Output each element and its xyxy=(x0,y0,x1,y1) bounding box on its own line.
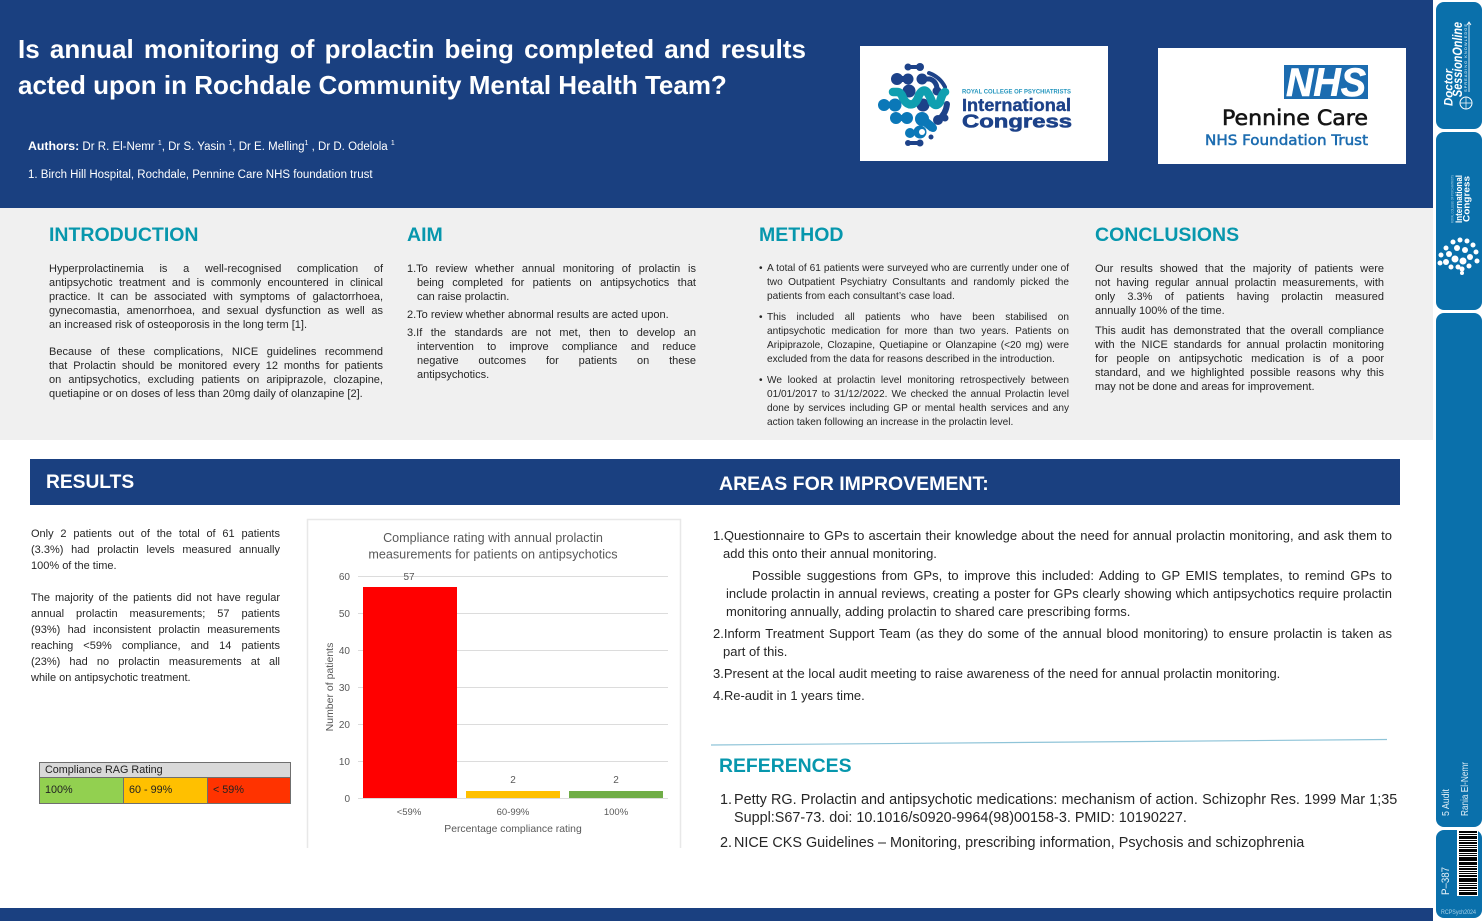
bar chart: compliance rating: 60 xyxy=(339,572,350,583)
poster number: P–387 xyxy=(1440,867,1452,895)
bar chart: compliance rating: 60-99% xyxy=(497,807,530,818)
method bullet list: patients from each consultant’s case load. xyxy=(767,291,955,302)
logo: RCPsych International Congress xyxy=(860,46,1108,161)
sidebar logo text xyxy=(1442,21,1472,110)
bar chart: compliance rating: 20 xyxy=(339,720,350,731)
bar chart: compliance rating: 2 xyxy=(613,775,619,786)
aim list: being completed for patients on antipsychotics that xyxy=(417,277,696,289)
method bullet list: We looked at prolactin level monitoring retrospectively between xyxy=(767,375,1069,386)
bar chart: compliance rating: Compliance rating with annual prolactin xyxy=(383,531,603,545)
grey band of four summary sections xyxy=(0,208,1433,440)
sidebar logo text: SessionOnline xyxy=(1450,22,1465,97)
barcode xyxy=(1457,830,1478,896)
results text: (93%) had inconsistent prolactin measurements xyxy=(31,624,280,636)
sidebar tab: poster number and barcode xyxy=(1436,830,1482,918)
title: acted upon in Rochdale Community Mental Health Team? xyxy=(18,70,727,100)
areas for improvement list: monitoring annually, adding prolactin to shared care prescribing forms. xyxy=(726,604,1130,619)
sidebar tab: category and author xyxy=(1436,313,1482,827)
conclusions text: This audit has demonstrated that the overall compliance xyxy=(1095,325,1384,337)
aim list: can raise prolactin. xyxy=(417,291,509,303)
aim list xyxy=(407,263,696,381)
logo: NHS Pennine Care: NHS xyxy=(1286,61,1366,105)
bar chart: compliance rating: 40 xyxy=(339,646,350,657)
sidebar congress logo: International xyxy=(1454,175,1464,223)
conclusions text: standard, and we highlighted possible reasons why this xyxy=(1095,367,1384,379)
introduction text: an increased risk of osteoporosis in the long term [1]. xyxy=(49,319,307,331)
heading: results: RESULTS xyxy=(46,472,134,493)
sidebar category and author text: 5 Audit xyxy=(1441,789,1452,816)
conclusions text: annually 100% of the time. xyxy=(1095,305,1225,317)
bar chart: compliance rating: <59% xyxy=(397,807,422,818)
sidebar congress logo: ROYAL COLLEGE OF PSYCHIATRISTS xyxy=(1450,174,1454,223)
method bullet list: excluded from the data for reasons described in the introduction. xyxy=(767,354,1055,365)
results text: (23%) had no prolactin measurements at all xyxy=(31,656,280,668)
heading: introduction: INTRODUCTION xyxy=(49,224,198,246)
areas for improvement list: include prolactin in annual reviews, creating a poster for GPs clearly showing which antipsychotics require prolactin xyxy=(726,586,1392,601)
results text: Only 2 patients out of the total of 61 patients xyxy=(31,528,280,540)
references list: 1. xyxy=(720,792,732,808)
rating: under 59% xyxy=(207,777,290,803)
logo: NHS Pennine Care xyxy=(1158,48,1406,164)
sidebar tab: Doctor Session Online xyxy=(1436,2,1482,129)
footer band xyxy=(0,908,1433,921)
sidebar category and author text: Rania El-Nemr xyxy=(1460,761,1471,816)
areas for improvement list: 2.Inform Treatment Support Team (as they do some of the annual blood monitoring) to ensure prolactin is taken as xyxy=(713,626,1392,641)
aim list: intervention to improve compliance and reduce xyxy=(417,341,696,353)
panel: method xyxy=(759,224,1070,428)
method bullet list: • xyxy=(759,263,763,274)
bar chart: compliance rating: 30 xyxy=(339,683,350,694)
bar chart: compliance rating: 2 xyxy=(510,775,516,786)
introduction text: on antipsychotics, excluding patients on aripiprazole, clozapine, xyxy=(49,374,383,386)
bar chart: compliance rating: 50 xyxy=(339,609,350,620)
sidebar congress logo xyxy=(1438,174,1480,275)
results text: annual prolactin measurements; 57 patients xyxy=(31,608,280,620)
introduction text: practice. It can be associated with symptoms of galactorrhoea, xyxy=(49,291,383,303)
rating: 60-99%: 60 - 99% xyxy=(129,784,172,796)
logo: RCPsych International Congress: Congress xyxy=(962,112,1072,132)
heading: references: REFERENCES xyxy=(719,755,852,777)
method bullet list: A total of 61 patients were surveyed who are currently under one of xyxy=(767,263,1069,274)
authors: Authors: Dr R. El-Nemr 1, Dr S. Yasin 1, Dr E. Melling1 , Dr D. Odelola 1 xyxy=(28,139,395,153)
logo: NHS Pennine Care: NHS Foundation Trust xyxy=(1205,133,1369,149)
panel: introduction xyxy=(49,224,384,400)
conclusions text: not having regular annual prolactin measurements, with xyxy=(1095,277,1384,289)
conclusions text: with the NICE standards for annual prolactin monitoring xyxy=(1095,339,1384,351)
poster number: RCPSych2024 xyxy=(1441,910,1477,916)
references list: Petty RG. Prolactin and antipsychotic medications: mechanism of action. Schizophr Res. 1999 Mar 1;35 xyxy=(734,792,1397,808)
rating: 100%: 100% xyxy=(45,784,73,796)
logo: RCPsych International Congress: International xyxy=(962,95,1071,115)
conclusions text: for people on antipsychotic medication is of a poor xyxy=(1095,353,1384,365)
sidebar category and author text xyxy=(1441,761,1471,816)
poster number xyxy=(1440,867,1477,916)
aim list: 2.To review whether abnormal results are acted upon. xyxy=(407,309,669,321)
affiliation: 1. Birch Hill Hospital, Rochdale, Pennine Care NHS foundation trust xyxy=(28,169,373,181)
aim list: antipsychotics. xyxy=(417,369,489,381)
conclusions text: may not be done and areas for improvement. xyxy=(1095,381,1315,393)
rating: 100% xyxy=(40,777,123,803)
areas for improvement list: 3.Present at the local audit meeting to raise awareness of the need for annual prolactin monitoring. xyxy=(713,666,1280,681)
areas for improvement list: part of this. xyxy=(723,644,787,659)
introduction text: Because of these complications, NICE guidelines recommend xyxy=(49,346,383,358)
aim list: negative outcomes for patients on these xyxy=(417,355,696,367)
rating: under 59%: < 59% xyxy=(213,784,244,796)
panel: conclusions xyxy=(1095,224,1384,393)
introduction text: Hyperprolactinemia is a well-recognised complication of xyxy=(49,263,383,275)
method bullet list: Aripiprazole, Clozapine, Quetiapine or Olanzapine (<20 mg) were xyxy=(767,340,1069,351)
introduction text: gynecomastia, amenorrhoea, and sexual dysfunction as well as xyxy=(49,305,383,317)
title: Is annual monitoring of prolactin being completed and results xyxy=(18,34,806,64)
heading: areas for improvement: AREAS FOR IMPROVEMENT: xyxy=(719,473,989,495)
results text: The majority of the patients did not have regular xyxy=(31,592,280,604)
references list: Suppl:S67-73. doi: 10.1016/s0920-9964(98)00158-3. PMID: 10190227. xyxy=(734,810,1187,826)
method bullet list: action taken following an increase in the prolactin level. xyxy=(767,417,1013,428)
references list: NICE CKS Guidelines – Monitoring, prescribing information, Psychosis and schizophrenia xyxy=(734,835,1304,851)
table: compliance RAG rating xyxy=(39,762,291,804)
sidebar logo text: SPREADING KNOWLEDGE xyxy=(1463,24,1468,92)
results text: 100% of the time. xyxy=(31,560,117,572)
heading: conclusions: CONCLUSIONS xyxy=(1095,224,1239,246)
areas for improvement list: Possible suggestions from GPs, to improve this included: Adding to GP EMIS templates, to remind GPs to xyxy=(752,568,1392,583)
table heading: Compliance RAG Rating xyxy=(45,764,163,776)
heading: method: METHOD xyxy=(759,224,844,246)
introduction text: quetiapine or on doses of less than 20mg daily of olanzapine [2]. xyxy=(49,388,363,400)
logo: NHS Pennine Care: Pennine Care xyxy=(1222,106,1368,130)
bar chart: compliance rating: 100% xyxy=(604,807,629,818)
introduction text: antipsychotic treatment and is commonly encountered in clinical xyxy=(49,277,383,289)
conclusions text: only 3.3% of patients having prolactin measured xyxy=(1095,291,1384,303)
references list xyxy=(720,792,1397,851)
rating: 60-99% xyxy=(123,777,207,803)
bar chart: compliance rating: measurements for patients on antipsychotics xyxy=(368,548,618,562)
heading: aim: AIM xyxy=(407,224,443,246)
sidebar tab: International Congress xyxy=(1436,132,1482,310)
areas for improvement list: 4.Re-audit in 1 years time. xyxy=(713,688,865,703)
areas for improvement list: 1.Questionnaire to GPs to ascertain their knowledge about the need for annual prolactin monitoring, and ask them to xyxy=(713,528,1392,543)
header band xyxy=(0,0,1433,208)
logo: RCPsych International Congress: ROYAL COLLEGE OF PSYCHIATRISTS xyxy=(962,88,1072,96)
areas for improvement list xyxy=(713,528,1392,703)
bar chart: compliance rating: Percentage compliance rating xyxy=(444,824,582,835)
method bullet list: • xyxy=(759,375,763,386)
method bullet list: antipsychotic medication for more than two years. Patients on xyxy=(767,326,1069,337)
method bullet list: 01/01/2017 to 31/12/2022. We checked the annual Prolactin level xyxy=(767,389,1069,400)
panel: aim xyxy=(407,224,696,381)
conclusions text: Our results showed that the majority of patients were xyxy=(1095,263,1384,275)
bar chart: compliance rating: 0 xyxy=(344,794,350,805)
bar chart: compliance rating: 57 xyxy=(403,572,415,583)
bar chart: compliance rating: Number of patients xyxy=(324,643,336,731)
references list: 2. xyxy=(720,835,732,851)
areas for improvement list: add this onto their annual monitoring. xyxy=(723,546,937,561)
conclusions text xyxy=(1095,263,1384,393)
section bar: results and areas for improvement xyxy=(30,459,1400,505)
results text: (3.3%) had prolactin levels measured annually xyxy=(31,544,280,556)
results text: reaching <59% compliance, and 14 patients xyxy=(31,640,280,652)
sidebar congress logo: Congress xyxy=(1462,176,1472,222)
method bullet list xyxy=(759,263,1070,428)
method bullet list: This included all patients who have been stabilised on xyxy=(767,312,1069,323)
results text: while on antipsychotic treatment. xyxy=(31,672,191,684)
introduction text xyxy=(49,263,384,400)
results text xyxy=(31,528,280,684)
sidebar logo text: Doctor xyxy=(1442,68,1456,106)
bar chart: compliance rating: 10 xyxy=(339,757,350,768)
aim list: 3.If the standards are not met, then to develop an xyxy=(407,327,696,339)
aim list: 1.To review whether annual monitoring of prolactin is xyxy=(407,263,696,275)
method bullet list: two Outpatient Psychiatry Consultants and randomly picked the xyxy=(767,277,1069,288)
title xyxy=(18,34,806,100)
bar chart: compliance rating xyxy=(306,518,682,848)
method bullet list: • xyxy=(759,312,763,323)
method bullet list: done by services including GP or mental health services and any xyxy=(767,403,1069,414)
introduction text: that Prolactin should be monitored every 12 months for patients xyxy=(49,360,383,372)
